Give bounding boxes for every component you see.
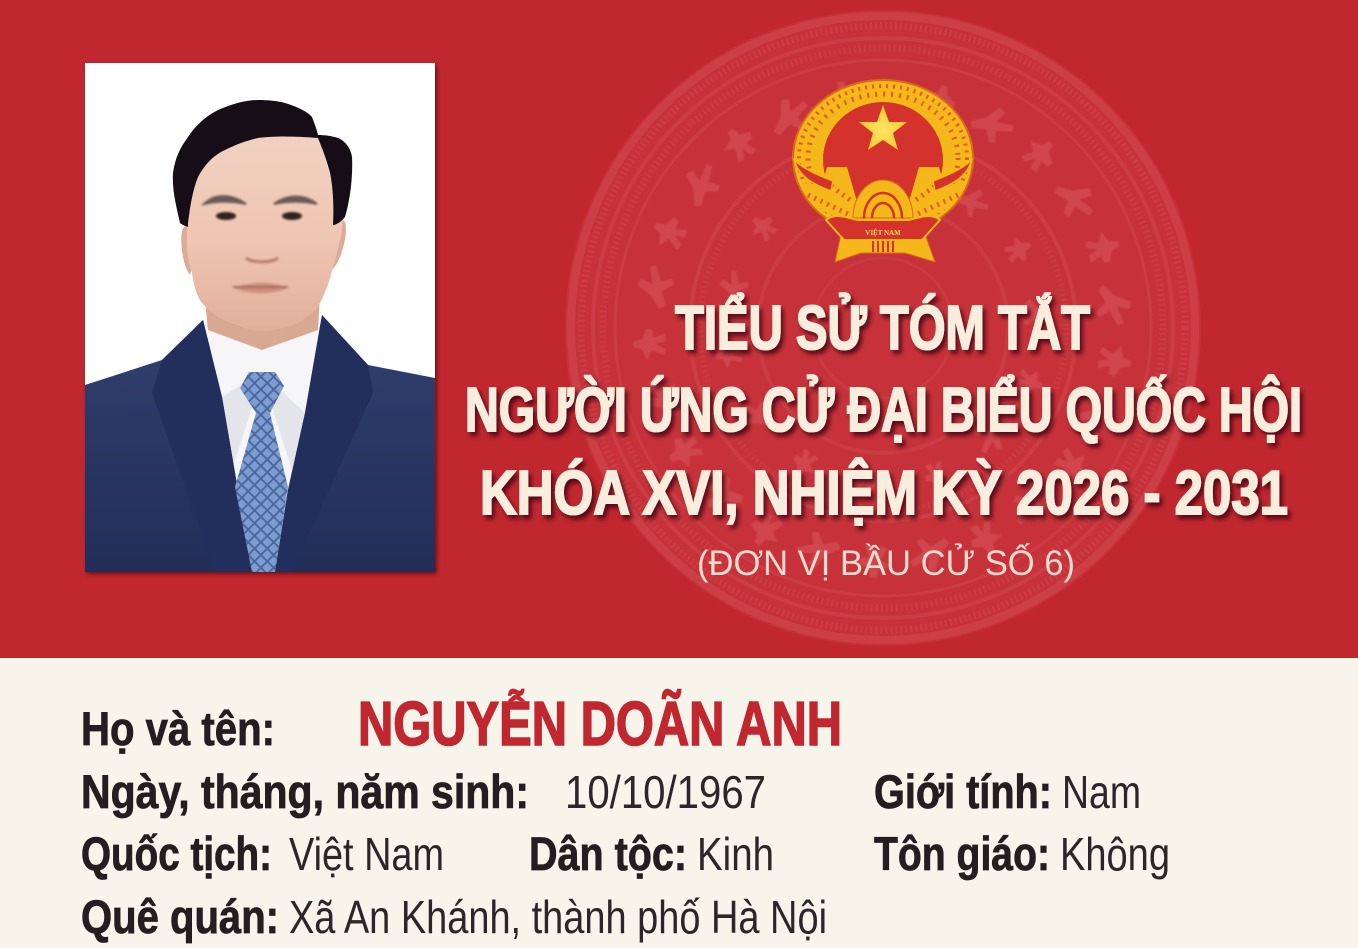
wheat grain texture [808, 178, 958, 214]
ethnicity value: Kinh [697, 828, 774, 880]
gender label: Giới tính: [874, 765, 1052, 818]
nationality, ethnicity and religion row [81, 827, 1170, 880]
tie [235, 372, 288, 572]
collar shadow [222, 372, 305, 470]
facial features [204, 196, 317, 293]
nationality label: Quốc tịch: [81, 827, 272, 880]
emblem wreath [793, 80, 973, 236]
portrait photo [85, 63, 435, 572]
emblem banner text: VIỆT NAM [865, 229, 901, 237]
title line 1: TIỂU SỬ TÓM TẮT [675, 294, 1090, 363]
religion value: Không [1060, 828, 1170, 880]
info panel background [0, 658, 1358, 948]
emblem red field [823, 102, 943, 218]
face [187, 125, 343, 331]
full name row [81, 690, 842, 759]
lapels [152, 315, 373, 572]
birth date and gender row [81, 765, 1141, 818]
ethnicity label: Dân tộc: [529, 827, 687, 880]
emblem banner [826, 216, 940, 240]
birth date value: 10/10/1967 [565, 766, 766, 818]
gender value: Nam [1062, 766, 1141, 818]
hometown value: Xã An Khánh, thành phố Hà Nội [289, 891, 827, 943]
emblem base [835, 234, 935, 262]
nationality value: Việt Nam [289, 828, 444, 880]
hometown label: Quê quán: [81, 890, 279, 943]
name value: NGUYỄN DOÃN ANH [358, 690, 842, 759]
drum figures ring [632, 78, 1134, 578]
hair [173, 100, 352, 227]
birth date label: Ngày, tháng, năm sinh: [81, 765, 529, 818]
hometown row [81, 890, 827, 943]
name label: Họ và tên: [81, 702, 275, 755]
emblem star [859, 105, 907, 150]
emblem gear [853, 180, 913, 218]
red header background [0, 0, 1358, 658]
shirt [203, 318, 322, 500]
title [465, 294, 1302, 528]
electoral unit subtitle: (ĐƠN VỊ BẦU CỬ SỐ 6) [697, 543, 1075, 583]
national emblem [793, 80, 973, 262]
bronze drum watermark [565, 10, 1201, 646]
emblem ribbons [794, 160, 972, 191]
emblem wheat [800, 167, 966, 220]
ears [181, 220, 346, 275]
wreath grains [799, 86, 967, 230]
suit jacket [85, 315, 435, 572]
neck [205, 295, 320, 350]
religion label: Tôn giáo: [874, 827, 1050, 880]
